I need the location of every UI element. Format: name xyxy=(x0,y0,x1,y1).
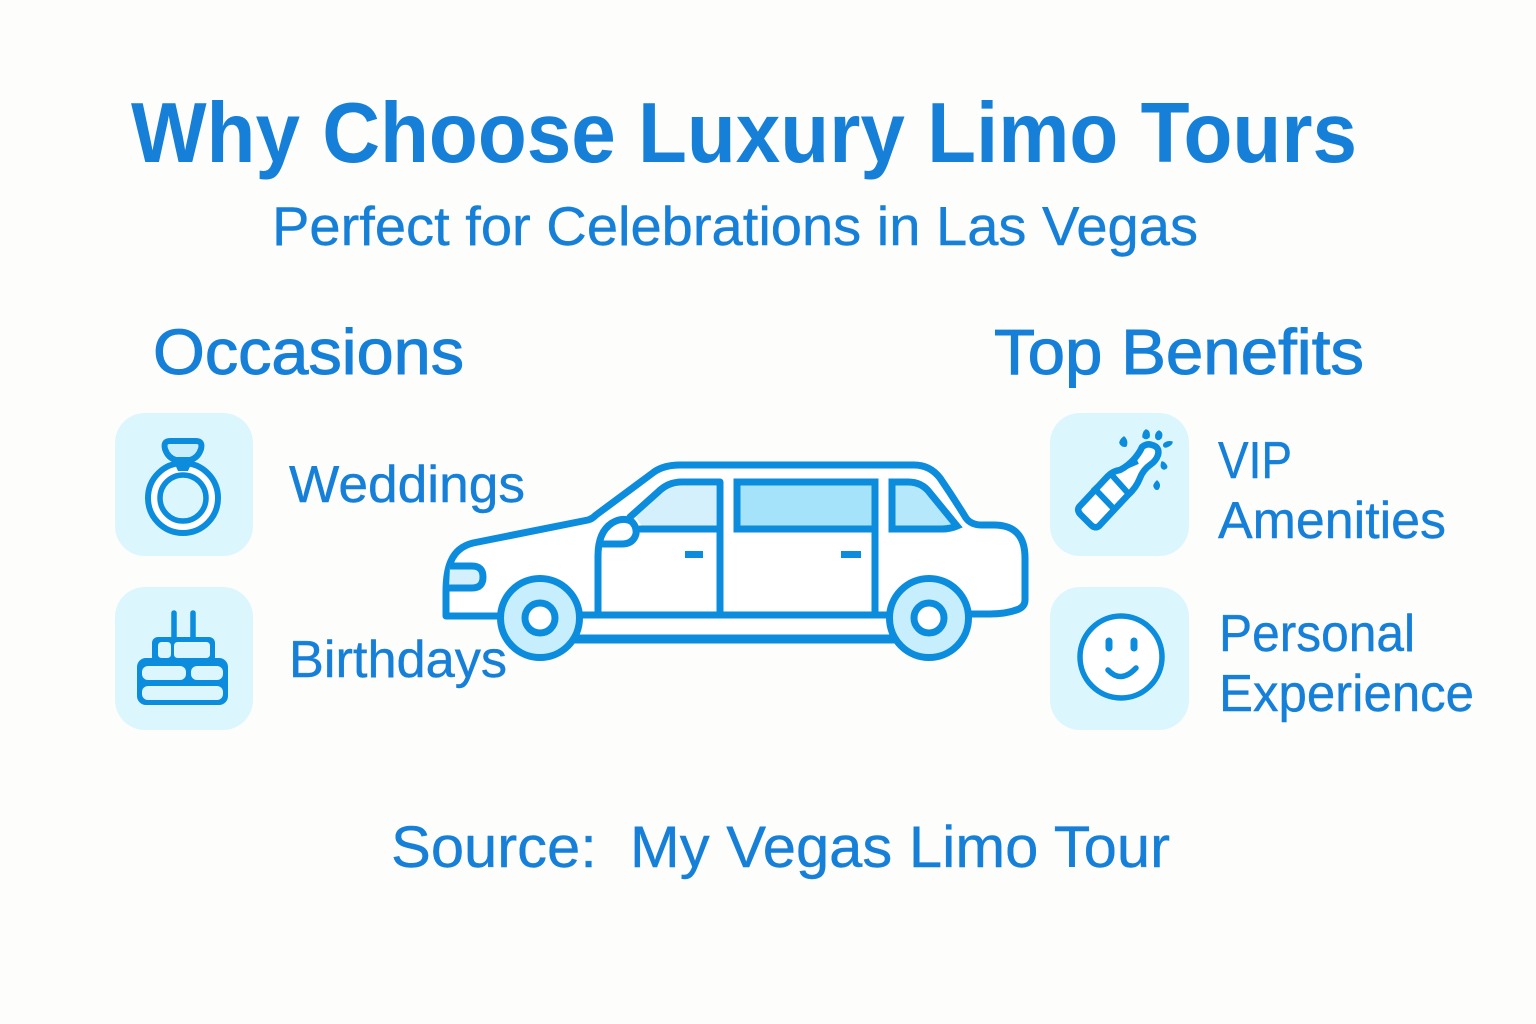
label: personal experience xyxy=(1219,605,1474,723)
heading: top benefits: Top Benefits xyxy=(994,316,1364,388)
windshield xyxy=(634,486,716,526)
icon: wedding ring xyxy=(115,413,253,556)
icon: smiley face xyxy=(1050,587,1189,730)
headlight xyxy=(449,566,483,588)
door handles xyxy=(685,551,861,558)
subtitle: Perfect for Celebrations in Las Vegas xyxy=(272,195,1198,257)
icon: champagne bottle xyxy=(1050,413,1189,556)
sill xyxy=(575,615,895,638)
heading: occasions: Occasions xyxy=(153,316,464,388)
label: birthdays: Birthdays xyxy=(289,631,507,689)
source line: Source: My Vegas Limo Tour xyxy=(391,815,1170,880)
front window frame and door xyxy=(598,482,720,612)
icon: birthday cake xyxy=(115,587,253,730)
label: personal experience: Personal xyxy=(1219,605,1415,663)
icon: limousine xyxy=(446,465,1025,658)
car body outline xyxy=(446,465,1025,640)
rear window xyxy=(892,482,957,529)
middle door xyxy=(872,529,878,612)
front wheel xyxy=(500,578,580,658)
label: weddings: Weddings xyxy=(289,456,525,514)
label: vip amenities: Amenities xyxy=(1218,492,1446,550)
label: personal experience: Experience xyxy=(1219,665,1474,723)
label: vip amenities: VIP xyxy=(1218,432,1292,490)
label: vip amenities xyxy=(1218,432,1446,550)
rear wheel xyxy=(890,578,968,658)
mirror xyxy=(598,519,636,556)
middle window xyxy=(737,482,875,529)
title: Why Choose Luxury Limo Tours xyxy=(131,86,1357,181)
